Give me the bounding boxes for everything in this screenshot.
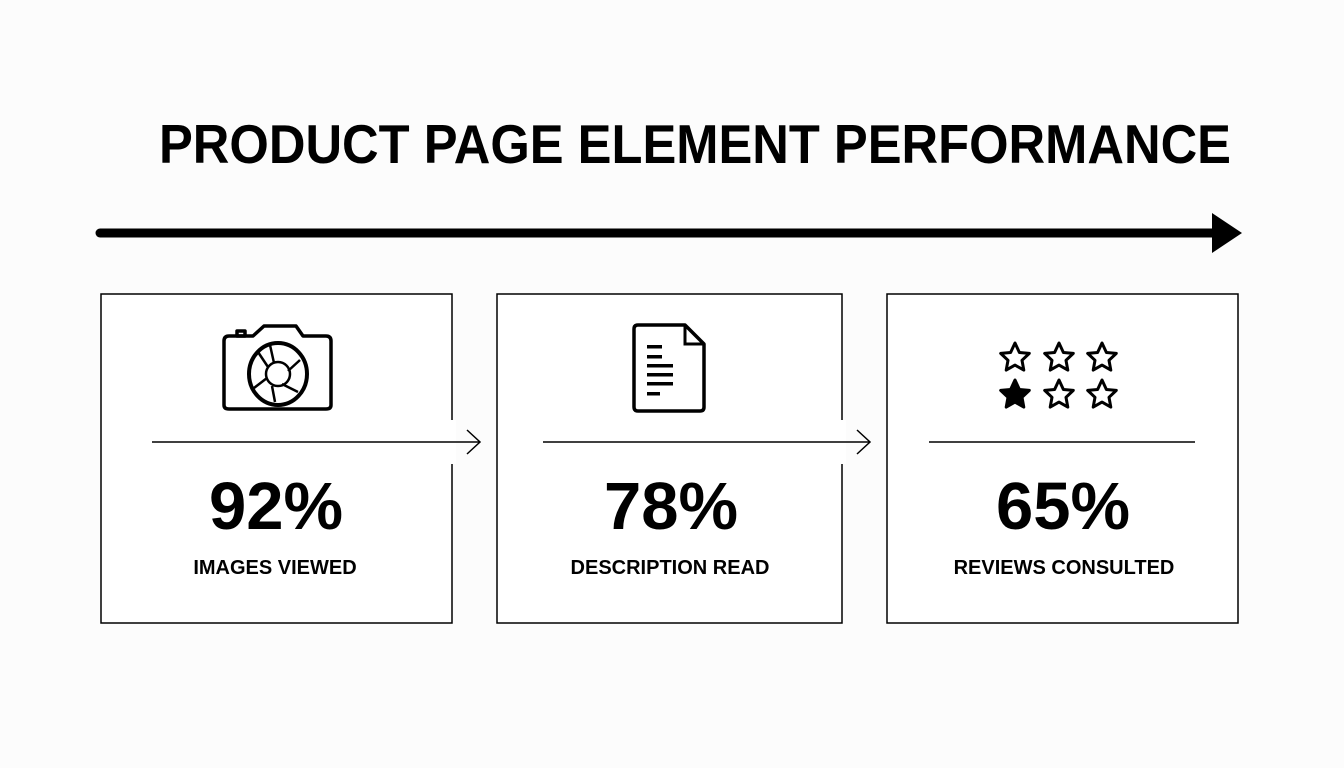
- arrow: panel 2 to 3: [543, 430, 870, 454]
- panel: description read: [497, 294, 870, 623]
- arrow: panel 1 to 2: [152, 430, 480, 454]
- icon: stars: [1001, 343, 1116, 407]
- stat: 65%: 65%: [996, 469, 1130, 544]
- divider line: [929, 441, 1195, 443]
- stat: 92%: 92%: [209, 469, 343, 544]
- stat: 78%: 78%: [604, 469, 738, 544]
- label: reviews consulted: REVIEWS CONSULTED: [954, 557, 1174, 579]
- panel: reviews consulted: [887, 294, 1238, 623]
- title: PRODUCT PAGE ELEMENT PERFORMANCE: [159, 113, 1231, 175]
- icon: document: [634, 325, 704, 411]
- icon: camera: [224, 326, 331, 409]
- label: images viewed: IMAGES VIEWED: [193, 557, 357, 579]
- panel: images viewed: [101, 294, 480, 623]
- arrow: main flow: [100, 213, 1242, 253]
- label: description read: DESCRIPTION READ: [571, 557, 769, 579]
